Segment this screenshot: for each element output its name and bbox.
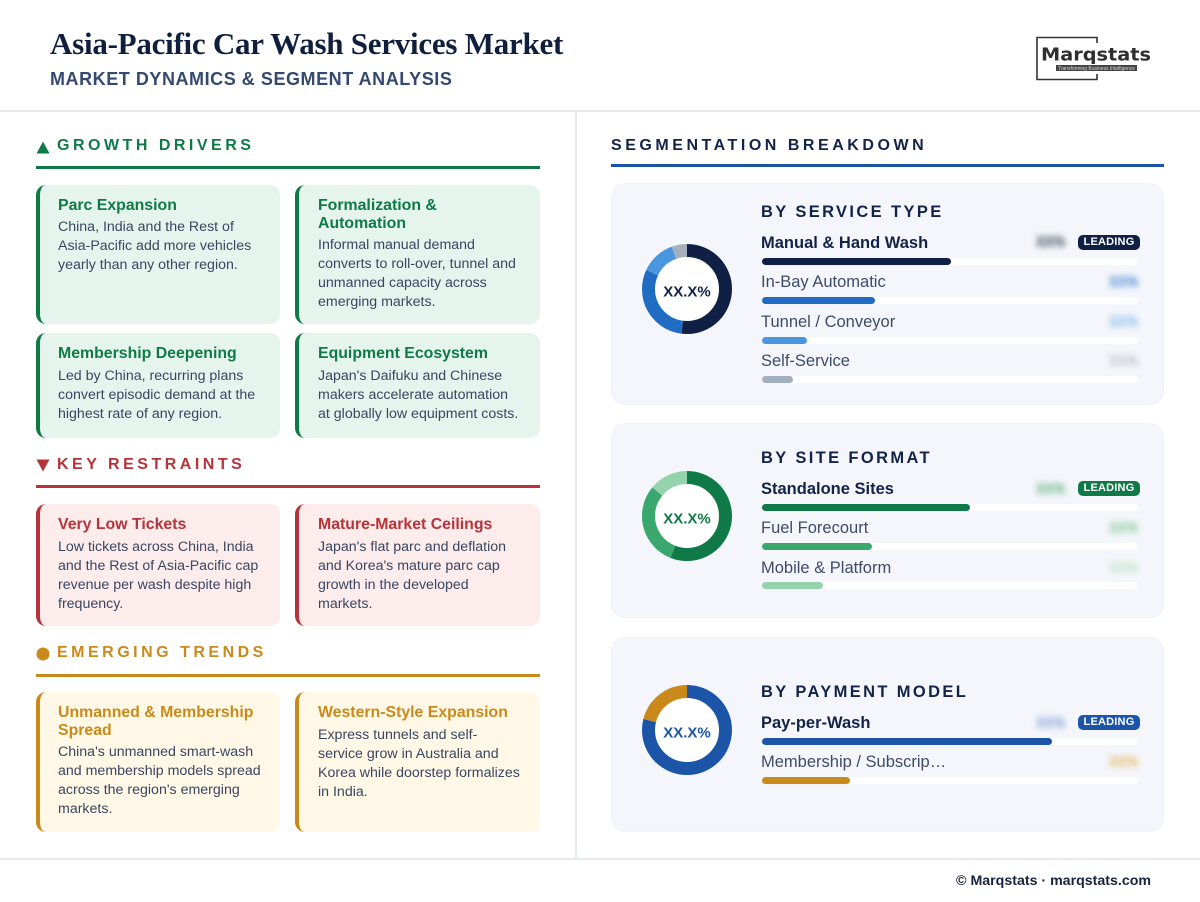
card: western-style expansion: Express tunnels and self-: [318, 726, 477, 742]
footer: [0, 858, 1200, 902]
row: pay-per-wash: Pay-per-Wash: [761, 714, 870, 732]
donut: service type: XX.X%: [663, 284, 711, 300]
donut: payment model: XX.X%: [663, 724, 711, 742]
header: [0, 0, 1200, 112]
card: formalization: Formalization &: [318, 197, 437, 214]
card: very low tickets: frequency.: [58, 596, 123, 612]
card: very low tickets: Very Low Tickets: [58, 516, 186, 533]
card: mature-market ceilings: Mature-Market Ceilings: [318, 516, 492, 533]
card: unmanned and membership: [36, 692, 280, 832]
card: formalization: emerging markets.: [318, 294, 435, 310]
heading: growth drivers: GROWTH DRIVERS: [57, 137, 254, 154]
card: western-style expansion: Korea while doorstep formalizes: [318, 764, 520, 780]
footer credit: © Marqstats · marqstats.com: [956, 873, 1151, 889]
panel: by service type: XX%: [1109, 314, 1138, 329]
card: formalization: [295, 185, 540, 324]
section: key restraints: [36, 456, 540, 626]
row: tunnel / conveyor: Tunnel / Conveyor: [761, 313, 895, 331]
card: mature-market ceilings: growth in the developed: [318, 577, 469, 593]
icon: circle: [36, 648, 50, 660]
donut: service type: [642, 244, 732, 334]
panel: by site format: XX%: [1036, 481, 1065, 496]
card: mature-market ceilings: and Korea's mature parc cap: [318, 558, 500, 574]
card: equipment ecosystem: makers accelerate automation: [318, 387, 508, 403]
heading: emerging trends: EMERGING TRENDS: [57, 644, 267, 661]
title: Asia-Pacific Car Wash Services Market: [50, 26, 563, 61]
section: emerging trends: [36, 644, 540, 832]
panel: by payment model: [611, 637, 1164, 832]
card: formalization: converts to roll-over, tunnel and: [318, 256, 516, 272]
donut: site format: XX.X%: [663, 510, 711, 528]
panel: by payment model: XX%: [1109, 754, 1138, 769]
card: unmanned and membership: Spread: [58, 722, 112, 738]
heading: segmentation breakdown: SEGMENTATION BREAKDOWN: [611, 137, 927, 154]
card: very low tickets: Low tickets across China, India: [58, 539, 254, 555]
row: manual and hand wash: Manual & Hand Wash: [761, 234, 928, 252]
logo: Marqstats: [1041, 44, 1151, 66]
card: formalization: Informal manual demand: [318, 237, 475, 253]
card: parc expansion: yearly than any other region.: [58, 257, 238, 273]
card: unmanned and membership: and membership models spread: [58, 763, 261, 779]
panel: by site format: XX%: [1109, 520, 1138, 535]
card: parc expansion: Parc Expansion: [58, 197, 177, 214]
row: membership / subscription: Membership / Subscrip…: [761, 753, 946, 771]
logo: Transforming Business Intelligence: [1058, 66, 1135, 72]
donut: payment model: [642, 685, 732, 775]
panel: by service type: XX%: [1109, 353, 1138, 368]
card: very low tickets: [36, 504, 280, 626]
panel: by service type: [611, 183, 1164, 405]
panel: by service type: XX%: [1036, 234, 1065, 249]
icon: up triangle: [36, 142, 50, 154]
card: membership deepening: highest rate of any region.: [58, 406, 222, 422]
card: membership deepening: Led by China, recurring plans: [58, 368, 243, 384]
panel: by payment model: LEADING: [1084, 716, 1134, 728]
heading: key restraints: KEY RESTRAINTS: [57, 456, 245, 473]
card: equipment ecosystem: Japan's Daifuku and Chinese: [318, 368, 502, 384]
card: very low tickets: and the Rest of Asia-Pacific cap: [58, 558, 258, 574]
heading: by site format: BY SITE FORMAT: [761, 449, 932, 467]
card: unmanned and membership: Unmanned & Membership: [58, 704, 253, 721]
row: mobile and platform: Mobile & Platform: [761, 559, 891, 577]
donut: site format: [642, 471, 732, 561]
card: membership deepening: [36, 333, 280, 438]
card: unmanned and membership: China's unmanned smart-wash: [58, 744, 253, 760]
card: western-style expansion: service grow in Australia and: [318, 746, 499, 762]
card: unmanned and membership: markets.: [58, 801, 112, 817]
heading: by payment model: BY PAYMENT MODEL: [761, 683, 968, 701]
card: formalization: Automation: [318, 214, 406, 232]
card: membership deepening: convert episodic demand at the: [58, 387, 255, 403]
card: very low tickets: revenue per wash despite high: [58, 577, 251, 593]
section: growth drivers: [36, 137, 540, 438]
panel: by site format: XX%: [1109, 560, 1138, 575]
card: equipment ecosystem: at globally low equipment costs.: [318, 406, 518, 422]
card: equipment ecosystem: [295, 333, 540, 438]
panel: by site format: LEADING: [1084, 482, 1134, 494]
logo: [1036, 36, 1151, 80]
panel: by payment model: XX%: [1036, 715, 1065, 730]
card: western-style expansion: in India.: [318, 784, 368, 800]
row: fuel forecourt: Fuel Forecourt: [761, 519, 868, 537]
row: standalone sites: Standalone Sites: [761, 480, 894, 498]
card: formalization: unmanned capacity across: [318, 275, 487, 291]
panel: by service type: LEADING: [1084, 236, 1134, 248]
panel: by service type: XX%: [1109, 274, 1138, 289]
card: western-style expansion: Western-Style Expansion: [318, 704, 508, 721]
row: self-service: Self-Service: [761, 352, 850, 370]
heading: by service type: BY SERVICE TYPE: [761, 203, 944, 221]
card: mature-market ceilings: Japan's flat parc and deflation: [318, 539, 506, 555]
card: western-style expansion: [295, 692, 540, 832]
icon: down triangle: [36, 460, 50, 472]
card: mature-market ceilings: markets.: [318, 596, 372, 612]
card: equipment ecosystem: Equipment Ecosystem: [318, 345, 488, 362]
column divider: [575, 112, 577, 858]
card: parc expansion: [36, 185, 280, 324]
card: membership deepening: Membership Deepening: [58, 345, 237, 362]
card: mature-market ceilings: [295, 504, 540, 626]
row: in-bay automatic: In-Bay Automatic: [761, 273, 886, 291]
panel: by site format: [611, 423, 1164, 618]
card: parc expansion: Asia-Pacific add more vehicles: [58, 238, 251, 254]
subtitle: MARKET DYNAMICS & SEGMENT ANALYSIS: [50, 69, 452, 89]
card: unmanned and membership: across the region's emerging: [58, 782, 240, 798]
card: parc expansion: China, India and the Rest of: [58, 219, 234, 235]
